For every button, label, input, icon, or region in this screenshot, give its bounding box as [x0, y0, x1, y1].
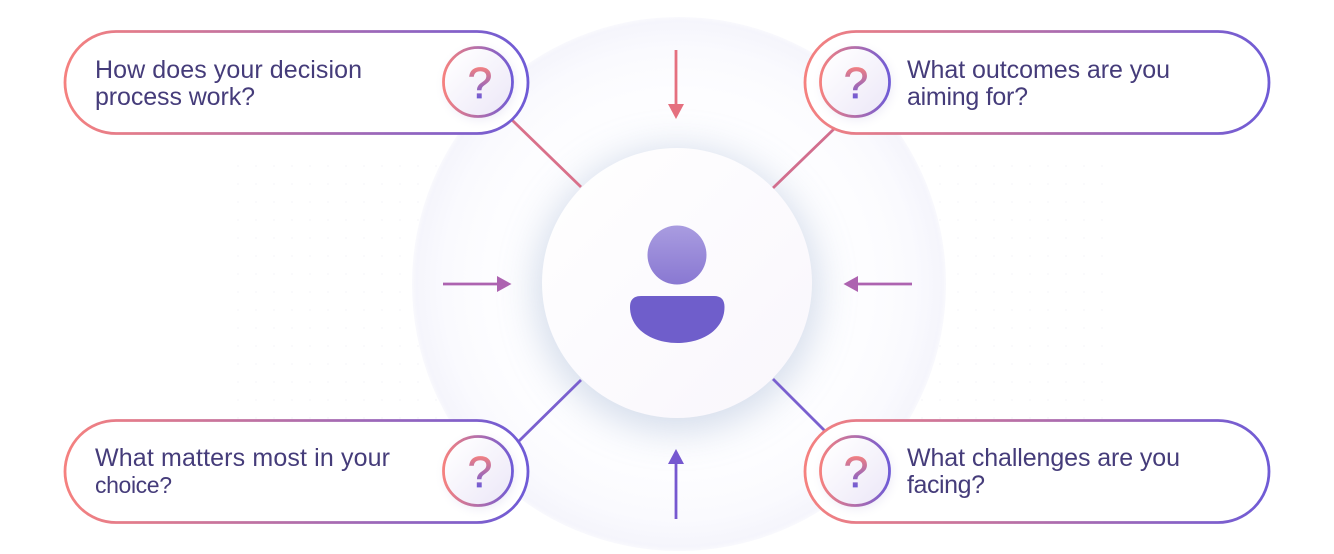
question text: How does your decision [95, 56, 362, 84]
question text: facing? [907, 471, 985, 499]
icon: question badge [811, 39, 903, 131]
person body [630, 296, 724, 343]
question text: aiming for? [907, 83, 1028, 111]
connector: bottom left [518, 380, 581, 442]
icon: question badge: ? [844, 448, 868, 497]
arrow: bottom [668, 449, 684, 519]
connector: top left [512, 120, 581, 187]
icon: question badge: ? [844, 59, 868, 108]
person head [648, 226, 706, 284]
question text: What challenges are you [907, 444, 1180, 472]
icon: question badge: ? [468, 59, 492, 108]
question text: What outcomes are you [907, 56, 1170, 84]
icon: question badge [434, 428, 526, 520]
icon: question badge: ? [468, 448, 492, 497]
large background circle [412, 17, 946, 551]
question text: choice? [95, 472, 172, 498]
arrow: top [668, 50, 684, 119]
question text: process work? [95, 83, 255, 111]
panel: what matters [65, 420, 528, 522]
connector: top right [773, 128, 835, 188]
icon: question badge [434, 39, 526, 131]
panel: challenges [805, 420, 1269, 522]
panel: decision process [65, 32, 528, 134]
center circle [542, 148, 812, 418]
question text: What matters most in your [95, 444, 390, 472]
connector: bottom right [773, 379, 825, 431]
arrow: right [844, 276, 912, 292]
inner circle shadow [535, 148, 819, 432]
arrow: left [443, 276, 512, 292]
icon: person [630, 226, 724, 343]
icon: question badge [811, 428, 903, 520]
dotted background [235, 150, 1105, 450]
panel: outcomes [805, 32, 1269, 134]
